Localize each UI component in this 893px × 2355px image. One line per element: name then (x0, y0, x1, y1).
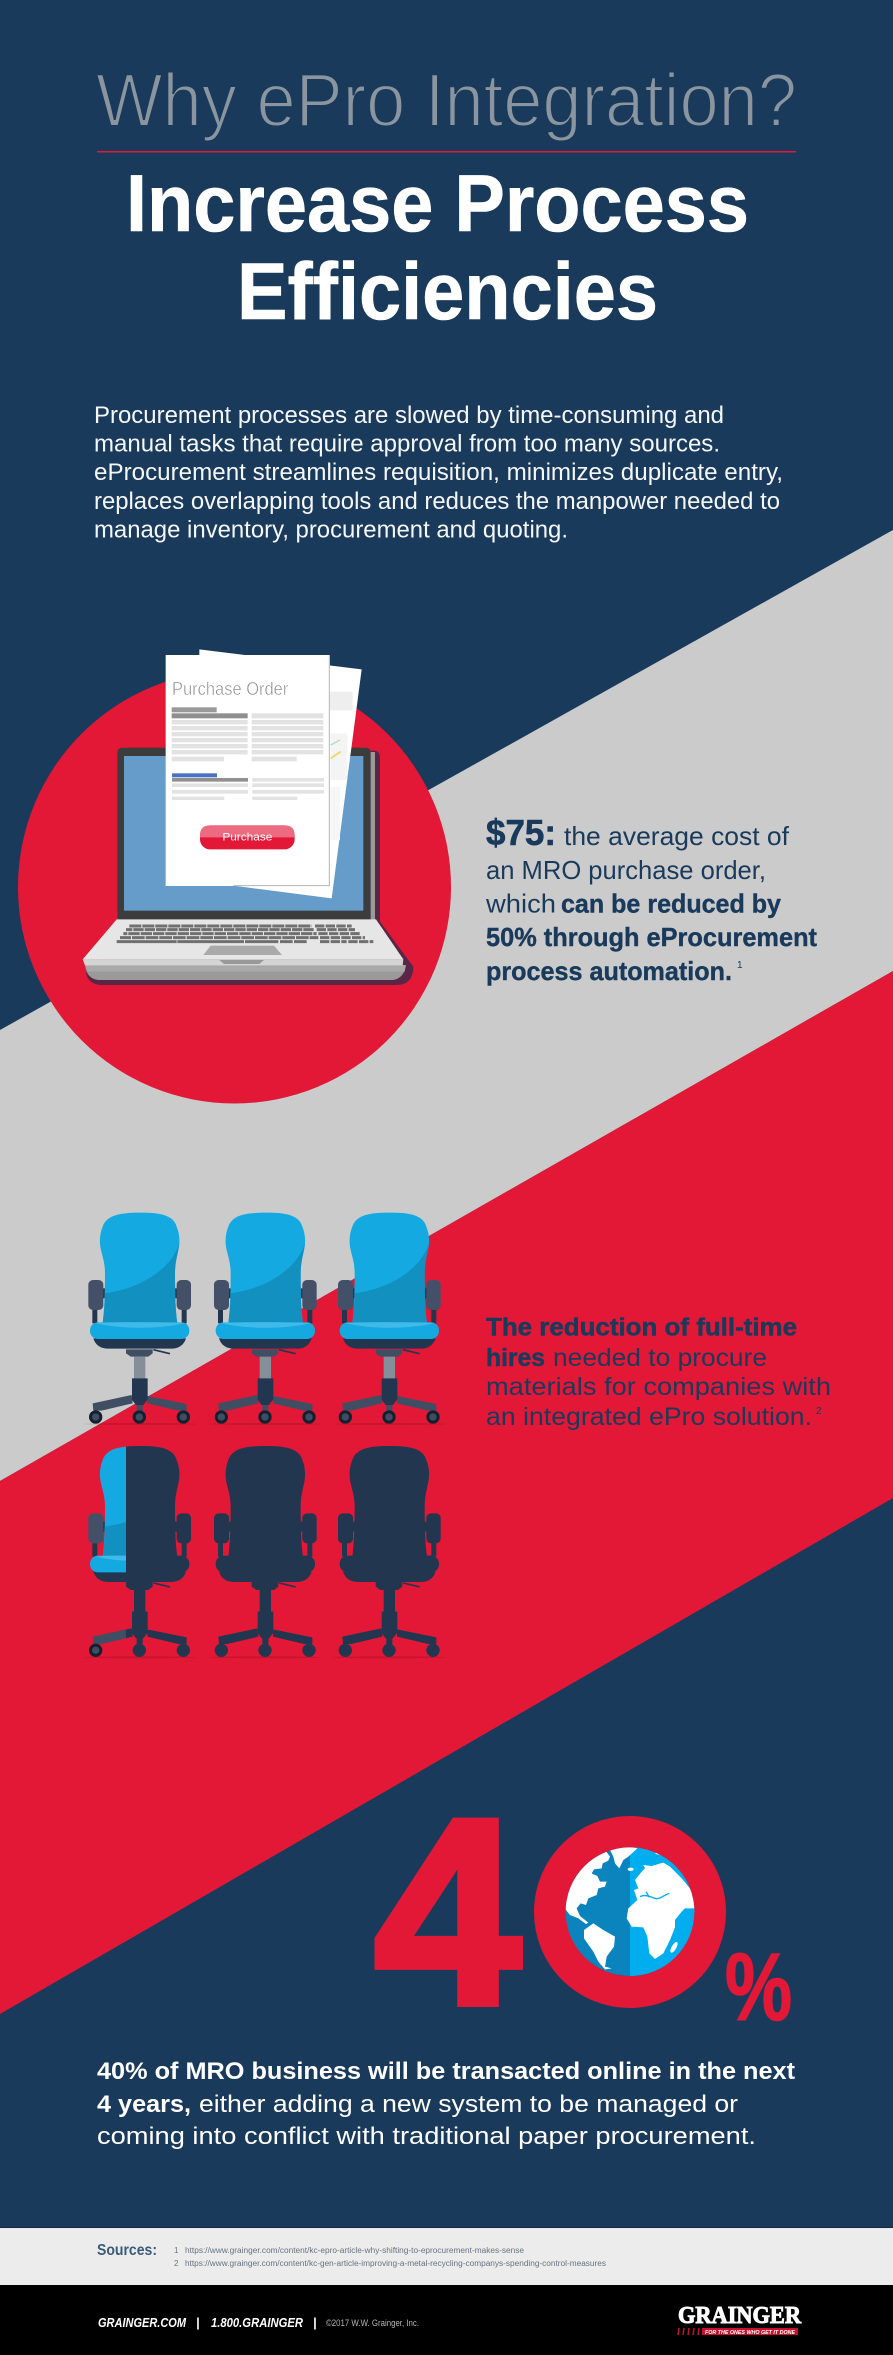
callout: reduction of full-time hires: needed to procure (553, 1344, 767, 1372)
purchase button: Purchase (222, 832, 272, 844)
bottom paragraph: either adding a new system to be managed or (199, 2091, 738, 2118)
callout: reduction of full-time hires (486, 1314, 831, 1431)
main heading (126, 159, 749, 337)
zero ring (550, 1832, 710, 1992)
keyboard (117, 926, 373, 942)
eyebrow title: Why ePro Integration? (96, 58, 797, 142)
footer contact line: 1.800.GRAINGER (211, 2316, 303, 2330)
callout: reduction of full-time hires: an integrated ePro solution. (486, 1403, 812, 1431)
main heading: Efficiencies (237, 247, 658, 337)
illustration: six office chairs (83, 1213, 446, 1658)
chair 1 (83, 1213, 197, 1425)
statistic: 40 percent with globe (374, 1816, 791, 2022)
bottom paragraph (97, 2058, 795, 2150)
back sheets of paper (199, 649, 362, 898)
sources strip (0, 2227, 893, 2285)
front sheet: purchase order (166, 655, 330, 886)
callout: $75 purchase order cost (485, 812, 817, 986)
chair 2 (209, 1213, 322, 1425)
digit 4: 4 (374, 1764, 523, 2060)
bottom paragraph: coming into conflict with traditional paper procurement. (97, 2123, 756, 2150)
bottom paragraph: 4 years, (97, 2091, 191, 2118)
intro paragraph: replaces overlapping tools and reduces the manpower needed to (94, 488, 780, 515)
intro paragraph (94, 402, 783, 544)
intro paragraph: Procurement processes are slowed by time-consuming and (94, 402, 724, 429)
background: gray diagonal band (0, 530, 893, 1481)
sources label: Sources: (97, 2242, 157, 2259)
laptop screen (124, 756, 363, 911)
laptop base (83, 919, 406, 980)
laptop shadow (86, 751, 413, 985)
callout: $75 purchase order cost: the average cost of (564, 821, 790, 851)
laptop lid (117, 748, 371, 921)
footer contact line: | (313, 2316, 316, 2330)
footer contact line: GRAINGER.COM (98, 2316, 187, 2330)
percent sign: % (725, 1934, 792, 2041)
chair 5 (209, 1446, 322, 1658)
bottom paragraph: 40% of MRO business will be transacted online in the next (97, 2058, 795, 2085)
source links: https://www.grainger.com/content/kc-gen-article-improving-a-metal-recycling-companys-spending-control-measures (185, 2259, 606, 2268)
callout: $75 purchase order cost: an MRO purchase order, (486, 855, 766, 885)
intro paragraph: manage inventory, procurement and quoting. (94, 516, 568, 544)
form title: Purchase Order (172, 678, 288, 699)
form rows (172, 707, 324, 800)
callout: reduction of full-time hires: hires (486, 1344, 545, 1372)
header block (96, 58, 797, 337)
main heading: Increase Process (126, 159, 749, 249)
intro paragraph: manual tasks that require approval from too many sources. (94, 430, 720, 458)
source links: 2 (174, 2259, 179, 2268)
callout: $75 purchase order cost: can be reduced by (561, 888, 782, 918)
footer contact line: | (196, 2316, 200, 2330)
background: red diagonal band (0, 971, 893, 2014)
logo: Grainger: FOR THE ONES WHO GET IT DONE (705, 2330, 795, 2336)
purchase button (200, 825, 295, 849)
callout: reduction of full-time hires: 2 (816, 1406, 822, 1417)
chair 6 (333, 1446, 446, 1658)
callout: $75 purchase order cost: 50% through eProcurement (486, 922, 817, 952)
intro paragraph: eProcurement streamlines requisition, minimizes duplicate entry, (94, 459, 783, 486)
callout: $75 purchase order cost: which (485, 888, 556, 918)
chair 3 (333, 1213, 446, 1425)
source links: 1 (174, 2246, 179, 2255)
footer bar (0, 2285, 893, 2355)
callout: reduction of full-time hires: materials for companies with (486, 1373, 831, 1401)
callout: $75 purchase order cost: process automation. (486, 956, 732, 986)
illustration: laptop with purchase order (83, 649, 413, 985)
footer contact line (98, 2316, 316, 2330)
chair 4: half filled (83, 1446, 197, 1658)
red rule (97, 151, 796, 152)
callout: reduction of full-time hires: The reduction of full-time (486, 1314, 797, 1342)
callout: $75 purchase order cost: 1 (737, 960, 743, 971)
callout: $75 purchase order cost: $75: (486, 812, 556, 853)
source links: https://www.grainger.com/content/kc-epro-article-why-shifting-to-eprocurement-makes-sense (185, 2246, 525, 2255)
logo: Grainger: GRAINGER (678, 2303, 802, 2329)
source links (174, 2246, 606, 2268)
icon: globe (563, 1847, 697, 1976)
copyright: ©2017 W.W. Grainger, Inc. (326, 2318, 419, 2329)
red circle behind laptop (18, 670, 451, 1104)
